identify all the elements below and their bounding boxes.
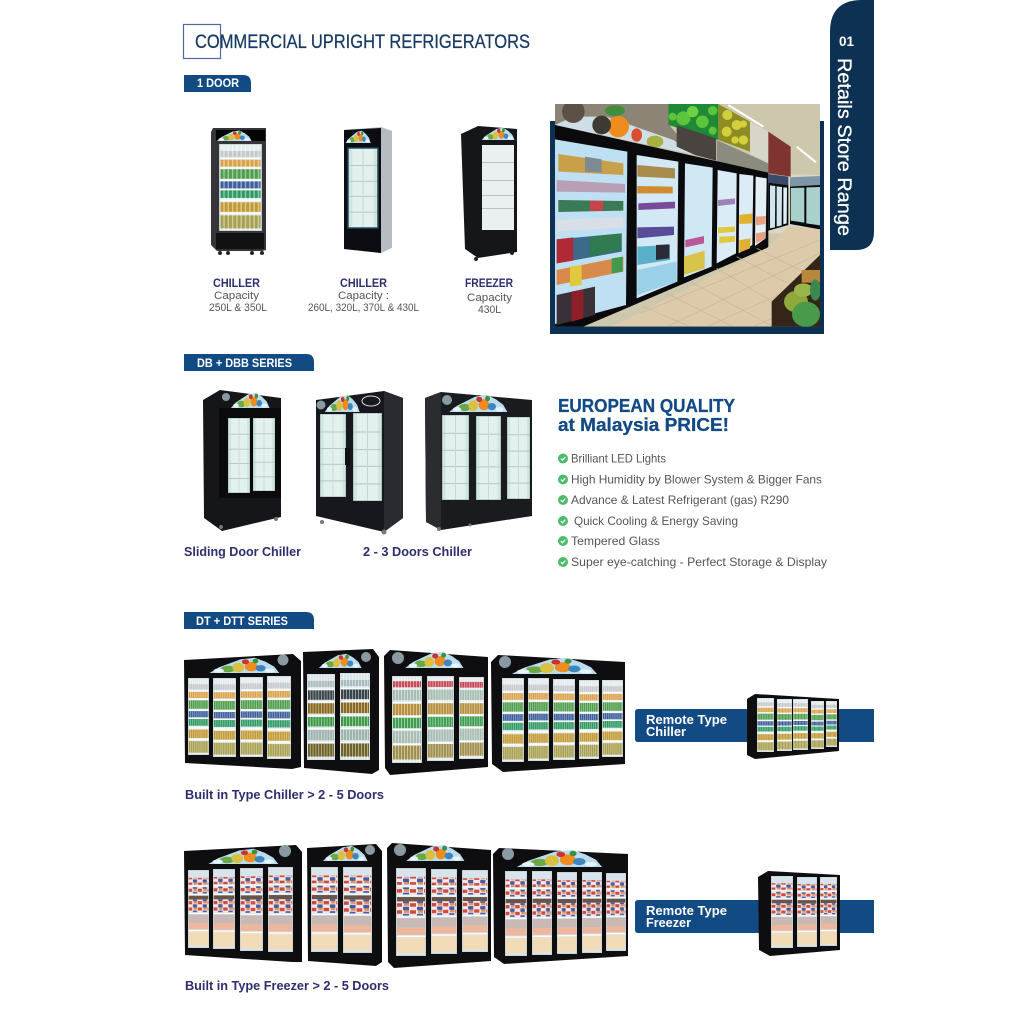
caption: chiller 250L: Capacity: [214, 290, 260, 302]
feature list: High Humidity by Blower System & Bigger Fans: [571, 472, 822, 486]
product: 1 door chiller 250L: [211, 128, 266, 255]
remote type chiller: Remote Type: [646, 712, 727, 727]
caption: chiller 260-430L: Capacity :: [338, 290, 389, 302]
section tag: dt + dtt series: [184, 612, 314, 629]
product: 1 door freezer 430L: [461, 126, 517, 261]
product: 2 door chiller: [316, 391, 403, 534]
caption: freezer 430L: 430L: [478, 304, 501, 316]
feature list: Super eye-catching - Perfect Storage & Display: [571, 555, 827, 569]
product: 3 door chiller: [425, 392, 532, 531]
caption: freezer 430L: FREEZER: [465, 276, 513, 290]
title: [184, 24, 530, 58]
side tab: retails store range: [830, 0, 874, 250]
feature list: Tempered Glass: [571, 534, 660, 548]
product: sliding door chiller: [203, 390, 281, 531]
remote type chiller: [635, 694, 874, 759]
caption: freezer 430L: Capacity: [467, 292, 513, 304]
feature list: Advance & Latest Refrigerant (gas) R290: [571, 493, 789, 507]
caption: chiller 250L: 250L & 350L: [209, 302, 267, 314]
caption: 2-3 doors chiller: 2 - 3 Doors Chiller: [363, 544, 472, 559]
caption: chiller 250L: CHILLER: [213, 276, 260, 290]
caption: sliding door chiller: Sliding Door Chiller: [184, 544, 301, 559]
caption: built in type chiller: Built in Type Chiller > 2 - 5 Doors: [185, 787, 384, 802]
caption: chiller 250L: [209, 276, 267, 314]
chiller: 3 door built in: [384, 650, 488, 775]
section tag: dt + dtt series: DT + DTT SERIES: [196, 614, 288, 628]
caption: chiller 260-430L: 260L, 320L, 370L & 430L: [308, 302, 419, 314]
remote type freezer: [635, 871, 874, 956]
caption: chiller 260-430L: [308, 276, 419, 314]
feature list: Brilliant LED Lights: [571, 452, 666, 466]
heading: european quality: [558, 395, 736, 435]
remote chiller unit: [747, 694, 839, 759]
remote freezer unit: [758, 871, 840, 956]
remote type freezer: Remote Type: [646, 903, 727, 918]
feature list: Quick Cooling & Energy Saving: [574, 514, 738, 528]
chiller: 5 door built in: [491, 655, 625, 772]
section tag: 1 door: 1 DOOR: [197, 76, 239, 90]
section tag: db + dbb series: [184, 354, 314, 371]
title: COMMERCIAL UPRIGHT REFRIGERATORS: [195, 31, 530, 53]
freezer: 2 door built in: [307, 844, 382, 966]
caption: chiller 260-430L: CHILLER: [340, 276, 387, 290]
section tag: 1 door: [184, 75, 251, 92]
side tab: retails store range: 01: [839, 33, 854, 49]
caption: built in type freezer: Built in Type Freezer > 2 - 5 Doors: [185, 978, 389, 993]
feature list: [558, 452, 827, 569]
side tab: retails store range: Retails Store Range: [833, 58, 854, 236]
photo doors: [555, 139, 627, 324]
product: 1 door chiller 260-430L: [344, 127, 392, 253]
heading: european quality: EUROPEAN QUALITY: [558, 395, 736, 416]
remote type chiller: Chiller: [646, 724, 686, 739]
freezer: 5 door built in: [493, 848, 628, 964]
section tag: db + dbb series: DB + DBB SERIES: [197, 356, 292, 370]
chiller: 2 door built in: [303, 649, 379, 774]
heading: european quality: at Malaysia PRICE!: [558, 414, 729, 435]
freezer: 3 door built in: [387, 843, 491, 968]
chiller: 4 door built in: [184, 654, 301, 769]
store photo with navy frame: [550, 100, 824, 334]
freezer: 4 door built in: [184, 845, 302, 962]
caption: freezer 430L: [465, 276, 513, 316]
remote type freezer: Freezer: [646, 915, 691, 930]
